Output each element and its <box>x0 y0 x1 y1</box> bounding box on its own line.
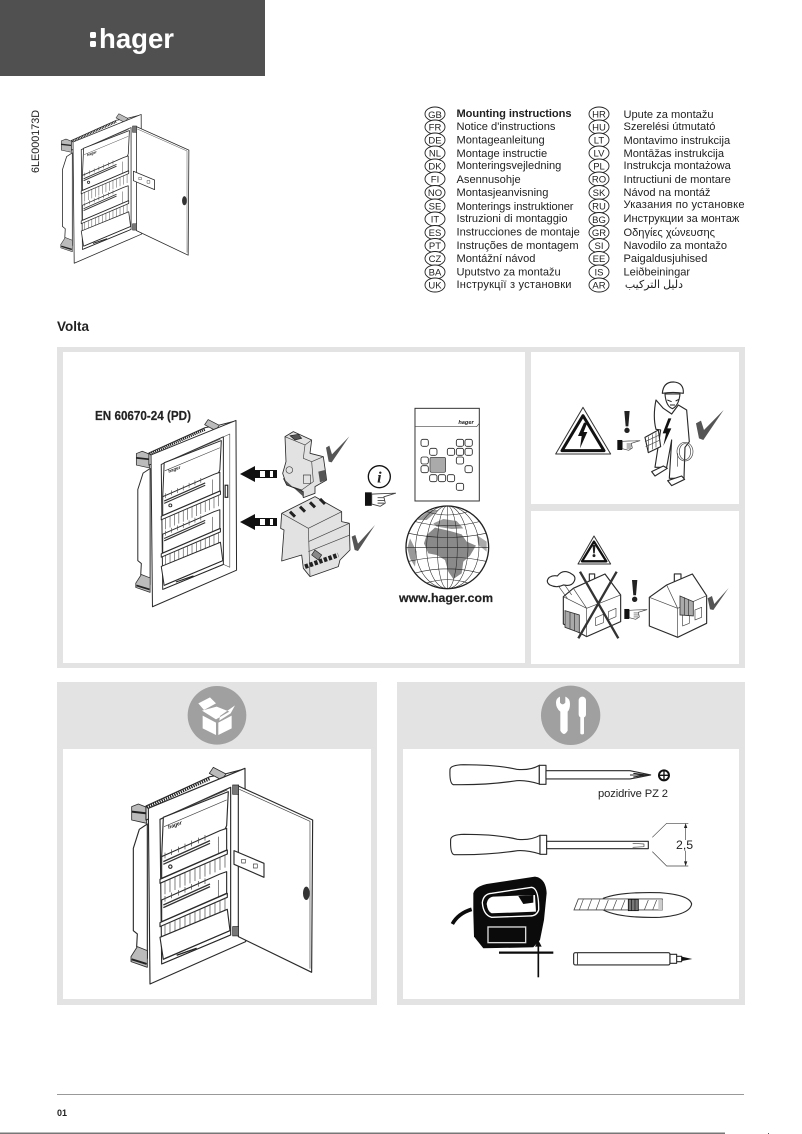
left language column: Montageanleitung <box>456 134 545 146</box>
right language column: Инструкции за монтаж <box>624 213 740 225</box>
left language column: BA <box>429 268 442 278</box>
right language column: SI <box>595 241 603 252</box>
left language column: FI <box>431 174 439 186</box>
left language column: PT <box>429 241 441 252</box>
left language column: Istruzioni di montaggio <box>456 213 568 225</box>
right language column: GR <box>592 228 606 239</box>
left language column: GB <box>428 110 442 121</box>
left language column: Mounting instructions <box>456 108 572 120</box>
icon: pointing hand <box>617 440 640 450</box>
tool: blade dimension <box>652 823 688 866</box>
right language column: Intructiuni de montare <box>624 174 731 186</box>
left language column: UK <box>428 280 442 292</box>
pozidrive label: pozidrive PZ 2 <box>598 788 668 800</box>
left language column: Monteringsvejledning <box>456 160 561 172</box>
left language column: Notice d'instructions <box>456 121 556 133</box>
left language column: Asennusohje <box>456 174 521 186</box>
product thumbnail: open cabinet <box>61 114 189 263</box>
tool: pozidrive screwdriver <box>450 765 669 785</box>
icon: pointing hand <box>624 609 647 619</box>
qualified electrician illustrations <box>547 382 729 638</box>
left language column: Instruções de montagem <box>456 240 579 252</box>
left language column: Montage instructie <box>456 148 547 160</box>
large open cabinet <box>131 767 313 984</box>
right language column: HU <box>592 122 606 134</box>
right language column: Instrukcja montażowa <box>624 160 732 172</box>
icon: warning triangle <box>578 536 611 564</box>
arrow: to cabinet upper <box>240 466 277 482</box>
right language column: EE <box>593 254 605 265</box>
panel: compatibility and warnings <box>57 347 745 668</box>
left language column: Monterings instruktioner <box>456 201 574 213</box>
icon: exclamation <box>632 580 637 602</box>
check mark: breaker <box>326 436 349 462</box>
left language column: ES <box>429 228 441 239</box>
electrician figure <box>645 382 693 486</box>
header band with hager logo: hager <box>99 23 174 54</box>
check mark: device <box>352 525 375 551</box>
right language column: Navodilo za montažo <box>624 240 727 252</box>
right language column <box>589 107 744 292</box>
document reference code: 6LE000173D <box>30 110 42 173</box>
outdoor house crossed out <box>547 572 621 638</box>
left language column: SE <box>429 202 441 212</box>
check mark: electrician <box>696 410 724 440</box>
right language column: RU <box>592 202 606 212</box>
bottom edge rule <box>0 1132 725 1134</box>
left language column: FR <box>429 122 441 134</box>
right language column: PL <box>593 162 605 172</box>
icon: pointing hand <box>365 492 396 506</box>
right language column: RO <box>592 174 606 186</box>
icon: information: i <box>377 469 382 486</box>
right language column: LV <box>594 148 605 160</box>
blade width label: 2,5 <box>676 838 693 852</box>
standard label: EN 60670-24 (PD) <box>95 409 191 423</box>
language list <box>425 107 744 292</box>
icon: exclamation <box>624 411 630 433</box>
left language column <box>425 107 580 292</box>
right language column: Návod na montáž <box>624 187 710 199</box>
left language column: Montážní návod <box>456 253 535 265</box>
left language column: CZ <box>429 254 442 265</box>
right language column: LT <box>594 136 604 146</box>
product name heading: Volta <box>57 319 89 334</box>
icon: circuit breaker <box>283 432 327 498</box>
closed cabinet <box>136 420 237 607</box>
illustrations in middle of main panel <box>281 408 489 589</box>
icon: wrench and screwdriver <box>541 686 600 745</box>
tool: utility knife <box>574 893 692 917</box>
panel: package contents <box>57 682 377 1005</box>
right language column: Szerelési útmutató <box>624 121 715 133</box>
left language column: Montasjeanvisning <box>456 187 548 199</box>
left language column: Інструкції з установки <box>456 279 572 291</box>
left language column: NL <box>429 148 441 160</box>
right language column: Указания по установке <box>624 199 744 211</box>
right language column: IS <box>595 268 603 278</box>
right language column: دليل التركيب <box>625 279 683 291</box>
right language column: Οδηγίες χώνευσης <box>624 227 715 239</box>
website address: www.hager.com <box>398 591 493 605</box>
icon: information <box>368 466 390 488</box>
indoor house <box>649 574 707 637</box>
right language column: Montāžas instrukcija <box>624 148 725 160</box>
icon: residual current device <box>281 497 350 577</box>
check mark: indoor <box>708 588 729 610</box>
page number: 01 <box>57 1108 67 1118</box>
tool: jigsaw <box>452 877 553 977</box>
right language column: Leiðbeiningar <box>624 266 690 278</box>
left language column: DK <box>428 162 442 172</box>
icon: electric hazard triangle <box>556 407 611 454</box>
right language column: HR <box>592 110 606 120</box>
left language column: IT <box>431 214 439 226</box>
left language column: NO <box>428 188 442 199</box>
left language column: DE <box>428 136 442 146</box>
right language column: BG <box>592 215 606 226</box>
header band with hager logo <box>0 0 265 76</box>
tool: flat screwdriver <box>451 834 648 855</box>
left language column: Uputstvo za montažu <box>456 266 561 278</box>
left language column: Instrucciones de montaje <box>456 226 580 238</box>
icon: globe <box>406 506 489 589</box>
right language column: Upute za montažu <box>624 109 714 121</box>
icon: open box <box>188 686 246 745</box>
footer rule <box>57 1094 744 1095</box>
arrow: to cabinet lower <box>240 514 277 530</box>
right language column: SK <box>593 188 606 199</box>
right language column: Paigaldusjuhised <box>624 253 707 265</box>
right language column: Montavimo instrukcija <box>624 135 731 147</box>
right language column: AR <box>592 280 606 292</box>
panel: required tools <box>397 682 745 1005</box>
tools illustrations <box>450 686 692 977</box>
manual booklet: hager <box>458 420 475 426</box>
manual booklet <box>415 408 479 501</box>
tool: test pen <box>574 953 692 965</box>
